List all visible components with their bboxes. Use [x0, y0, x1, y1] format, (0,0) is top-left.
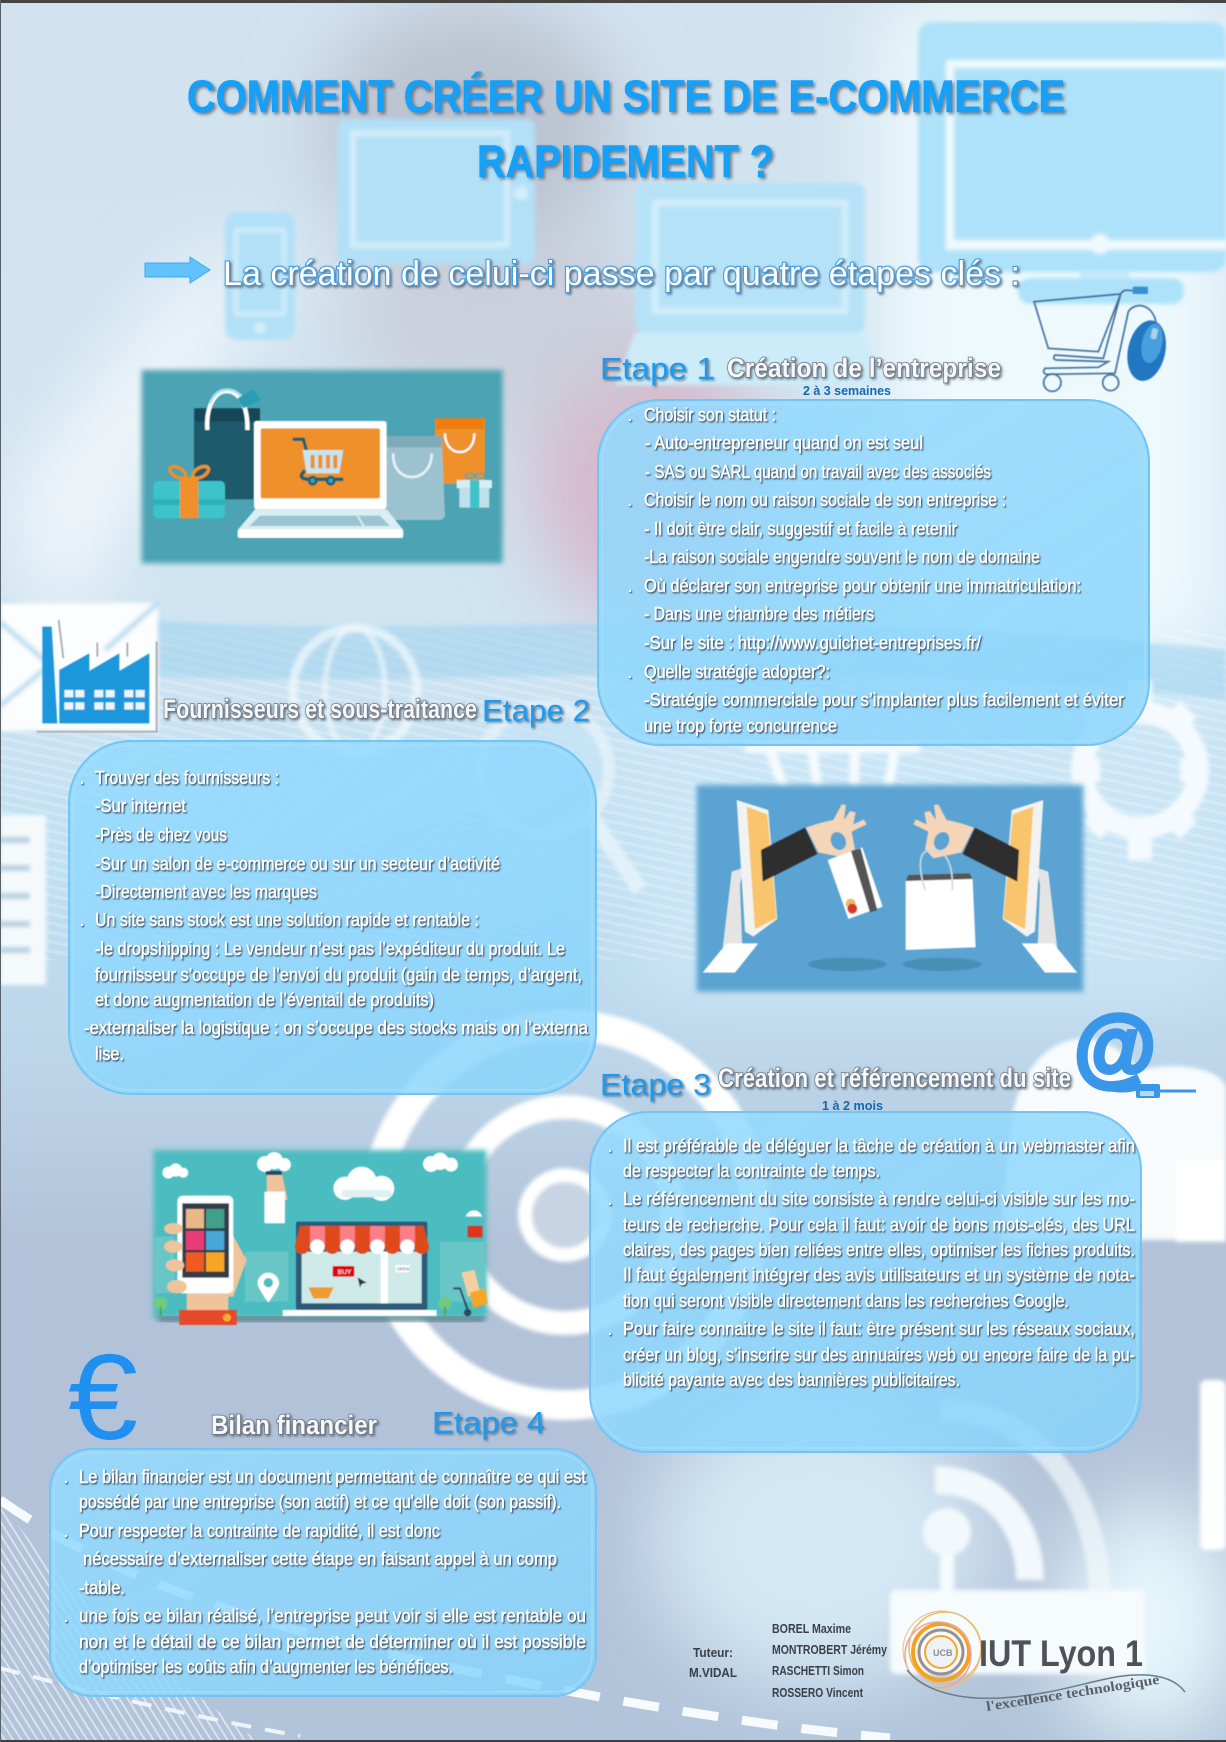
authors: RASCHETTI Simon [772, 1664, 864, 1678]
text: etape 1 list: Quelle stratégie adopter?: [644, 662, 830, 682]
icon: euro sign: € [68, 1329, 138, 1465]
text: etape 3 paragraphs: . [608, 1139, 612, 1155]
text: etape 1 list: Choisir son statut : [644, 405, 776, 425]
illustration: laptop and shopping bags [142, 370, 503, 563]
text: etape 2 list: -Sur un salon de e-commerce ou sur un secteur d’activité [95, 854, 500, 874]
text: etape 4 paragraphs [64, 1467, 586, 1677]
panel: etape 1 heading [600, 351, 1001, 398]
stripes and wave bands [0, 600, 1226, 1742]
text: etape 1 list: - SAS ou SARL quand on travail avec des associés [645, 462, 991, 482]
text: etape 3 paragraphs: Il faut également intégrer des avis utilisateurs et un système de nota- [623, 1265, 1135, 1285]
text: etape 3 paragraphs: Le référencement du site consiste à rendre celui-ci visible sur les mo- [623, 1189, 1135, 1209]
illustration: mobile shop scene [153, 1150, 488, 1325]
logo: IUT Lyon 1: UCB [933, 1648, 953, 1658]
text: etape 4 paragraphs: . [64, 1609, 68, 1625]
title [187, 71, 1065, 187]
text: etape 1 list [628, 405, 1124, 736]
panel: etape 3 heading [600, 1063, 1071, 1113]
tutor: Tuteur: [693, 1646, 733, 1660]
text: etape 3 paragraphs: claires, des pages bien reliées entre elles, optimiser les fiches produits. [623, 1240, 1135, 1260]
panel: etape 1 heading: Création de l’entreprise [727, 353, 1001, 383]
authors: BOREL Maxime [772, 1622, 851, 1636]
text: etape 3 paragraphs: de respecter la contrainte de temps. [623, 1161, 880, 1181]
panel: etape 4 content [50, 1449, 596, 1696]
title: RAPIDEMENT ? [477, 136, 774, 187]
logo: IUT Lyon 1: l'excellence technologique [985, 1673, 1160, 1715]
panel: etape 1 content [598, 400, 1149, 745]
authors: ROSSERO Vincent [772, 1686, 864, 1700]
subtitle: La création de celui-ci passe par quatre étapes clés : [223, 255, 1020, 293]
text: etape 2 list: . [80, 771, 84, 787]
text: etape 3 paragraphs: créer un blog, s’inscrire sur des annuaires web ou encore faire de la pu- [623, 1345, 1135, 1365]
icon: at sign with audio jack [1074, 999, 1196, 1098]
panel: etape 2 content [69, 741, 596, 1094]
text: etape 2 list: et donc augmentation de l’éventail de produits) [95, 990, 434, 1010]
background icons: envelope, globe, magnifier, gear, document [0, 603, 1206, 985]
text: etape 2 list: fournisseur s’occupe de l’envoi du produit (gain de temps, d’argent, [95, 965, 582, 985]
text: etape 4 paragraphs: nécessaire d’externaliser cette étape en faisant appel à un comp [83, 1549, 557, 1569]
panel: etape 3 content [590, 1112, 1141, 1452]
illustration: mobile shop scene: BUY [338, 1269, 352, 1276]
text: etape 4 paragraphs: . [64, 1524, 68, 1540]
text: etape 1 list: Où déclarer son entreprise pour obtenir une immatriculation: [644, 576, 1081, 596]
text: etape 4 paragraphs: possédé par une entreprise (son actif) et ce qu'elle doit (son passif). [79, 1492, 561, 1512]
text: etape 4 paragraphs: Pour respecter la contrainte de rapidité, il est donc [79, 1521, 440, 1541]
dashed white road line [0, 1500, 890, 1738]
text: etape 1 list: . [628, 579, 632, 595]
panel: etape 3 heading: Création et référencement du site [718, 1063, 1071, 1093]
logo: IUT Lyon 1 [903, 1611, 1185, 1715]
text: etape 1 list: - Il doit être clair, suggestif et facile à retenir [644, 519, 957, 539]
text: etape 3 paragraphs: blicité payante avec des bannières publicitaires. [623, 1370, 960, 1390]
text: etape 4 paragraphs: -table. [79, 1578, 125, 1598]
title: COMMENT CRÉER UN SITE DE E-COMMERCE [187, 71, 1065, 122]
illustration: mobile shop scene: OPEN [397, 1266, 409, 1271]
device silhouettes [225, 22, 1226, 385]
icon: at sign with audio jack: @ [1074, 999, 1156, 1095]
text: etape 1 list: . [628, 665, 632, 681]
logo: IUT Lyon 1: IUT Lyon 1 [979, 1633, 1143, 1674]
text: etape 4 paragraphs: une fois ce bilan réalisé, l’entreprise peut voir si elle est rentable ou [79, 1606, 586, 1626]
text: etape 1 list: . [628, 493, 632, 509]
text: etape 3 paragraphs: teurs de recherche. Pour cela il faut: avoir de bons mots-clés, des URL [623, 1215, 1135, 1235]
panel: etape 1 heading: Etape 1 [600, 351, 715, 386]
text: etape 2 list: -Sur internet [95, 796, 186, 816]
text: etape 2 list: -Près de chez vous [95, 825, 227, 845]
tutor [689, 1646, 737, 1680]
text: etape 4 paragraphs: Le bilan financier est un document permettant de connaître ce qui est [79, 1467, 586, 1487]
panel: etape 3 heading: Etape 3 [600, 1067, 711, 1102]
text: etape 3 paragraphs: Pour faire connaitre le site il faut: être présent sur les réseaux sociaux, [623, 1319, 1135, 1339]
panel: etape 2 heading: Etape 2 [482, 693, 590, 728]
text: etape 1 list: - Auto-entrepreneur quand on est seul [645, 433, 923, 453]
text: etape 2 list: . [80, 913, 84, 929]
illustration: hands exchanging card and bag between monitors [697, 785, 1083, 992]
text: etape 2 list: -le dropshipping : Le vendeur n’est pas l’expéditeur du produit. Le [95, 939, 565, 959]
text: etape 2 list: lise. [95, 1044, 124, 1064]
text: etape 2 list: -Directement avec les marques [95, 882, 317, 902]
text: etape 4 paragraphs: non et le détail de ce bilan permet de déterminer où il est possible [79, 1632, 586, 1652]
text: etape 2 list: Trouver des fournisseurs : [95, 768, 279, 788]
text: etape 3 paragraphs: Il est préférable de déléguer la tâche de création à un webmaster afin [623, 1136, 1135, 1156]
text: etape 2 list [80, 768, 589, 1064]
text: etape 1 list: -La raison sociale engendre souvent le nom de domaine [644, 547, 1040, 567]
text: etape 3 paragraphs: tion qui seront visible directement dans les recherches Google. [623, 1291, 1069, 1311]
text: etape 2 list: -externaliser la logistique : on s’occupe des stocks mais on l’externa [84, 1018, 589, 1038]
text: etape 3 paragraphs [608, 1136, 1135, 1390]
panel: etape 4 heading: Etape 4 [432, 1405, 545, 1440]
authors [772, 1622, 887, 1700]
authors: MONTROBERT Jérémy [772, 1643, 887, 1657]
background: cloud and wifi, target rings [375, 1025, 1226, 1674]
panel: etape 1 heading: 2 à 3 semaines [803, 384, 891, 398]
tutor: M.VIDAL [689, 1666, 737, 1680]
icon: shopping cart with mouse [1034, 287, 1171, 391]
text: etape 3 paragraphs: . [608, 1192, 612, 1208]
text: etape 2 list: Un site sans stock est une solution rapide et rentable : [95, 910, 479, 930]
text: etape 1 list: Choisir le nom ou raison sociale de son entreprise : [644, 490, 1006, 510]
text: etape 4 paragraphs: . [64, 1470, 68, 1486]
panel: etape 3 heading: 1 à 2 mois [822, 1099, 883, 1113]
panel: etape 4 heading [211, 1405, 545, 1440]
icon: factory [37, 620, 157, 732]
text: etape 1 list: -Stratégie commerciale pour s’implanter plus facilement et éviter [644, 690, 1124, 710]
text: etape 4 paragraphs: d’optimiser les coûts afin d’augmenter les bénéfices. [79, 1657, 453, 1677]
arrow [145, 257, 210, 283]
panel: etape 2 heading: Fournisseurs et sous-traitance [163, 694, 477, 724]
text: etape 1 list: -Sur le site : http://www.guichet-entreprises.fr/ [644, 633, 981, 653]
panel: etape 4 heading: Bilan financier [211, 1410, 377, 1440]
text: etape 1 list: . [628, 408, 632, 424]
text: etape 1 list: une trop forte concurrence [644, 716, 837, 736]
text: etape 1 list: - Dans une chambre des métiers [644, 604, 874, 624]
text: etape 3 paragraphs: . [608, 1322, 612, 1338]
